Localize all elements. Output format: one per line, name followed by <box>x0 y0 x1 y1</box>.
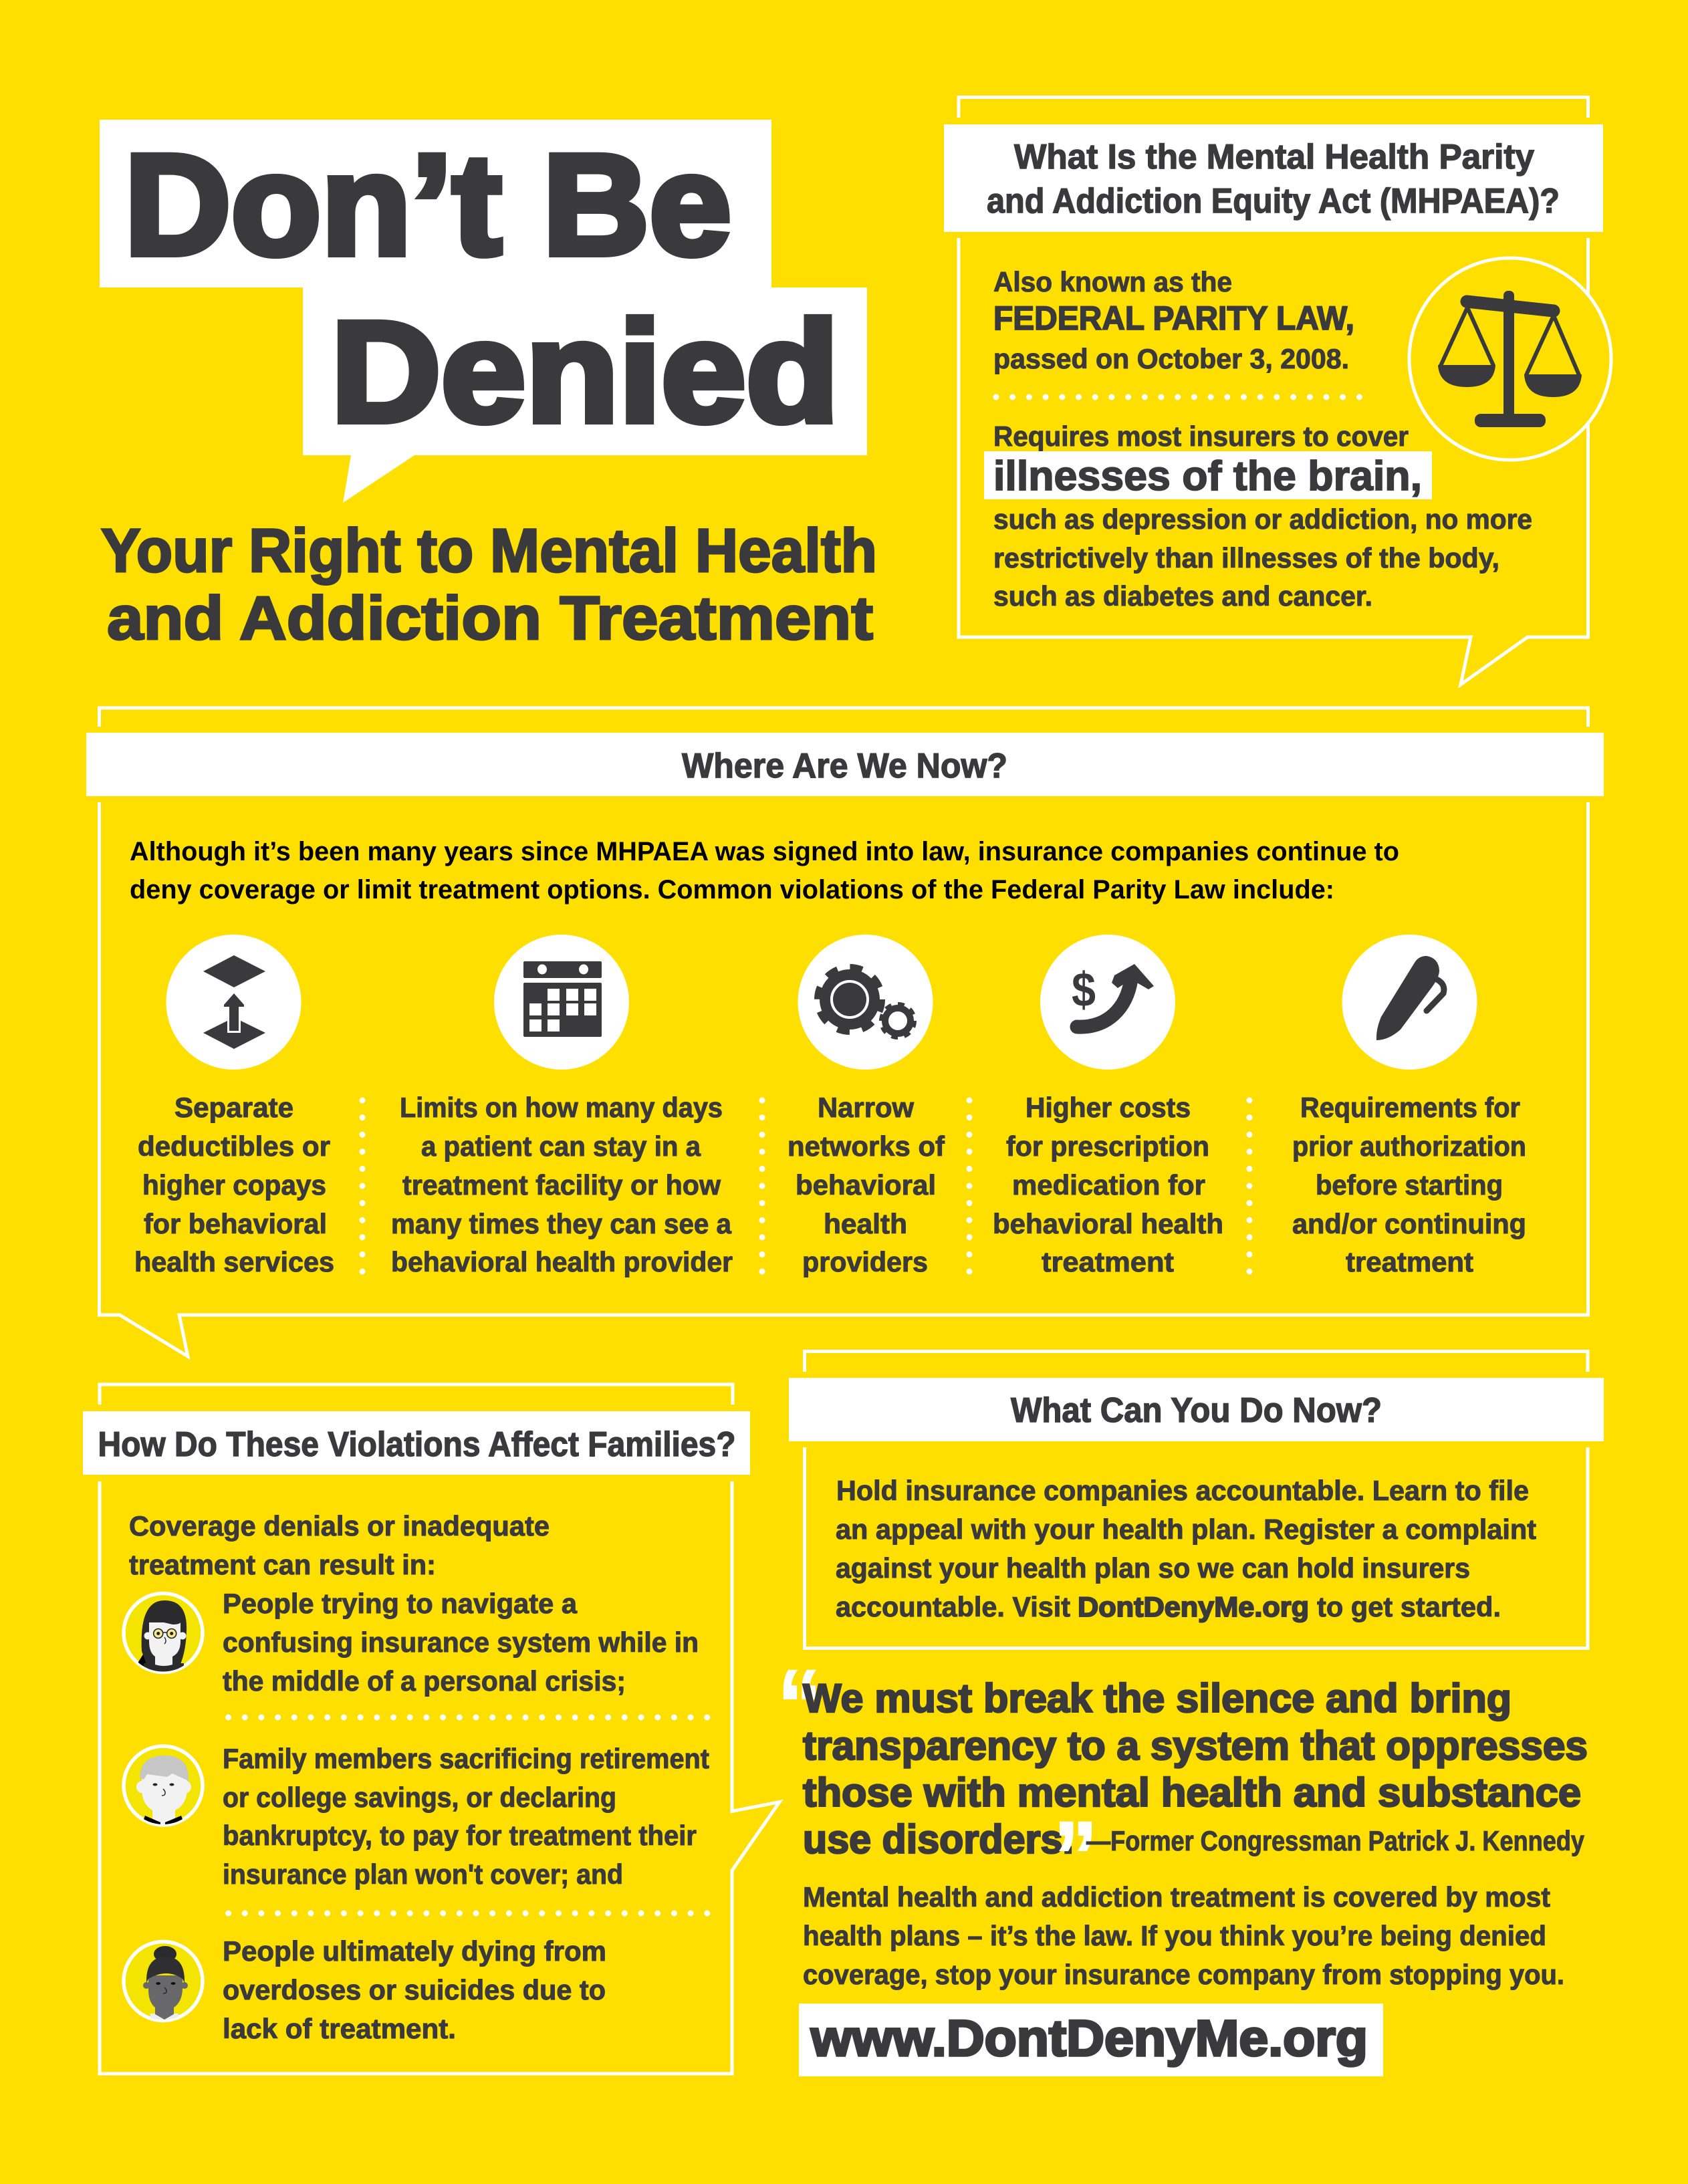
text: introduction: deny coverage or limit treatment options. Common violations of the Federal Parity Law include: <box>130 875 1334 904</box>
title speech bubble <box>100 120 867 503</box>
text: federal parity law: FEDERAL PARITY LAW, <box>993 299 1354 337</box>
heading: what can you do now: What Can You Do Now? <box>1011 1391 1382 1430</box>
text: requires most insurers: Requires most insurers to cover <box>993 420 1409 452</box>
text: separate deductibles <box>134 1092 334 1278</box>
text: limits on days: Limits on how many days <box>400 1092 723 1123</box>
text: prior authorization: Requirements for <box>1300 1092 1520 1123</box>
text: narrow networks: providers <box>802 1246 928 1278</box>
text: limits on days: a patient can stay in a <box>421 1130 701 1162</box>
icon: woman with glasses <box>124 1594 203 1673</box>
text: family members sacrificing: Family members sacrificing retirement <box>223 1743 709 1774</box>
text: narrow networks: health <box>824 1208 907 1239</box>
text: higher costs: behavioral health <box>993 1208 1223 1239</box>
quote <box>803 1676 1588 1862</box>
text: people navigating <box>223 1588 699 1697</box>
heading: how violations affect families: How Do These Violations Affect Families? <box>98 1425 735 1464</box>
text: hold insurance companies accountable: DontDenyMe.org <box>1078 1591 1309 1622</box>
text: narrow networks <box>788 1092 945 1278</box>
heading: what is MHPAEA: What Is the Mental Health Parity <box>1014 138 1534 176</box>
text: separate deductibles: higher copays <box>142 1169 326 1201</box>
panel: what can you do now <box>789 1352 1604 1649</box>
heading: what can you do now <box>789 1378 1604 1441</box>
text: people dying <box>223 1935 606 2044</box>
text: limits on days <box>391 1092 733 1278</box>
text: separate deductibles: Separate <box>174 1092 293 1123</box>
text: people navigating: People trying to navigate a <box>223 1588 578 1619</box>
panel: where are we now <box>86 708 1604 1356</box>
text: narrow networks: networks of <box>788 1130 945 1162</box>
text: introduction <box>130 837 1399 904</box>
text: federal parity law: passed on October 3, 2008. <box>993 343 1349 374</box>
quote mark: opening: “ <box>777 1649 822 1761</box>
icon: woman with bun <box>124 1941 203 2026</box>
text: hold insurance companies accountable: to get started. <box>1317 1591 1501 1622</box>
quote: use disorders. <box>803 1817 1074 1862</box>
text: family members sacrificing: insurance plan won't cover; and <box>223 1858 623 1890</box>
panel: how violations affect families <box>83 1384 779 2074</box>
panel: what is MHPAEA <box>944 98 1611 685</box>
text: people dying: People ultimately dying from <box>223 1935 606 1967</box>
text: hold insurance companies accountable: accountable. Visit <box>836 1591 1070 1622</box>
text: it's the law: health plans – it’s the law. If you think you’re being denied <box>803 1920 1546 1951</box>
text: separate deductibles: deductibles or <box>138 1130 330 1162</box>
text: coverage denials <box>129 1510 550 1580</box>
text: it's the law: coverage, stop your insurance company from stopping you. <box>803 1959 1564 1990</box>
title: Denied: Denied <box>331 292 839 452</box>
subtitle <box>101 517 877 652</box>
heading: how violations affect families <box>83 1411 750 1475</box>
text: family members sacrificing: or college savings, or declaring <box>223 1782 616 1813</box>
text: higher costs: Higher costs <box>1026 1092 1191 1123</box>
subtitle: and Addiction Treatment <box>107 584 873 652</box>
heading: what is MHPAEA <box>944 124 1603 232</box>
text: family members sacrificing: bankruptcy, to pay for treatment their <box>223 1820 697 1851</box>
text: separate deductibles: for behavioral <box>144 1208 327 1239</box>
quote: those with mental health and substance <box>803 1770 1581 1815</box>
text: narrow networks: behavioral <box>796 1169 936 1201</box>
text: higher costs: medication for <box>1012 1169 1205 1201</box>
title: Don't Be: Don’t Be <box>124 125 731 285</box>
text: coverage denials: Coverage denials or inadequate <box>129 1510 550 1542</box>
text: limits on days: treatment facility or how <box>402 1169 721 1201</box>
text: requires most insurers <box>984 420 1532 612</box>
heading: where are we now <box>86 733 1604 796</box>
text: narrow networks: Narrow <box>818 1092 914 1123</box>
text: family members sacrificing <box>223 1743 709 1890</box>
icon: older man <box>124 1746 203 1828</box>
text: limits on days: behavioral health provider <box>391 1246 733 1278</box>
icon: rising cost arrow: $ <box>1072 963 1096 1017</box>
text: people navigating: the middle of a personal crisis; <box>223 1665 626 1697</box>
quote mark: closing: ” <box>1054 1800 1098 1913</box>
text: federal parity law: Also known as the <box>993 266 1232 297</box>
text: hold insurance companies accountable: Hold insurance companies accountable. Learn to file <box>836 1475 1529 1506</box>
icon: calendar <box>494 935 629 1070</box>
icon: pen <box>1342 935 1477 1070</box>
text: introduction: Although it’s been many years since MHPAEA was signed into law, insurance companies continue to <box>130 837 1399 866</box>
text: hold insurance companies accountable: against your health plan so we can hold insurers <box>836 1552 1470 1584</box>
text: prior authorization: and/or continuing <box>1292 1208 1526 1239</box>
text: prior authorization: before starting <box>1316 1169 1503 1201</box>
icon: gears <box>798 935 933 1070</box>
text: hold insurance companies accountable <box>836 1475 1536 1622</box>
text: limits on days: many times they can see a <box>391 1208 732 1239</box>
subtitle: Your Right to Mental Health <box>101 517 877 585</box>
text: prior authorization: treatment <box>1346 1246 1473 1278</box>
text: requires most insurers: such as diabetes and cancer. <box>993 580 1372 612</box>
icon: separate deductibles <box>166 935 301 1070</box>
text: people dying: overdoses or suicides due to <box>223 1974 606 2006</box>
text: people navigating: confusing insurance system while in <box>223 1626 699 1658</box>
text: federal parity law <box>993 266 1354 374</box>
text: coverage denials: treatment can result in: <box>129 1549 436 1580</box>
quote: transparency to a system that oppresses <box>803 1723 1588 1768</box>
text: prior authorization: prior authorization <box>1292 1130 1526 1162</box>
highlight: illnesses of the brain: illnesses of the brain, <box>993 453 1422 499</box>
website callout: www.DontDenyMe.org <box>810 2010 1368 2067</box>
text: it's the law: Mental health and addiction treatment is covered by most <box>803 1881 1550 1913</box>
text: higher costs: for prescription <box>1006 1130 1209 1162</box>
quote attribution: —Former Congressman Patrick J. Kennedy <box>1086 1825 1585 1856</box>
heading: what is MHPAEA: and Addiction Equity Act (MHPAEA)? <box>987 182 1560 221</box>
text: higher costs: treatment <box>1042 1246 1174 1278</box>
text: it's the law <box>803 1881 1564 1990</box>
icon: rising cost arrow <box>1040 935 1175 1070</box>
text: hold insurance companies accountable: an appeal with your health plan. Register a complaint <box>836 1513 1536 1545</box>
heading: where are we now: Where Are We Now? <box>682 747 1007 785</box>
text: prior authorization <box>1292 1092 1526 1278</box>
text: separate deductibles: health services <box>134 1246 334 1278</box>
icon: scales in circle <box>1409 258 1611 460</box>
text: higher costs <box>993 1092 1223 1278</box>
text: requires most insurers: restrictively than illnesses of the body, <box>993 542 1499 574</box>
text: people dying: lack of treatment. <box>223 2013 456 2044</box>
text: requires most insurers: such as depression or addiction, no more <box>993 503 1532 535</box>
quote: We must break the silence and bring <box>803 1676 1512 1721</box>
